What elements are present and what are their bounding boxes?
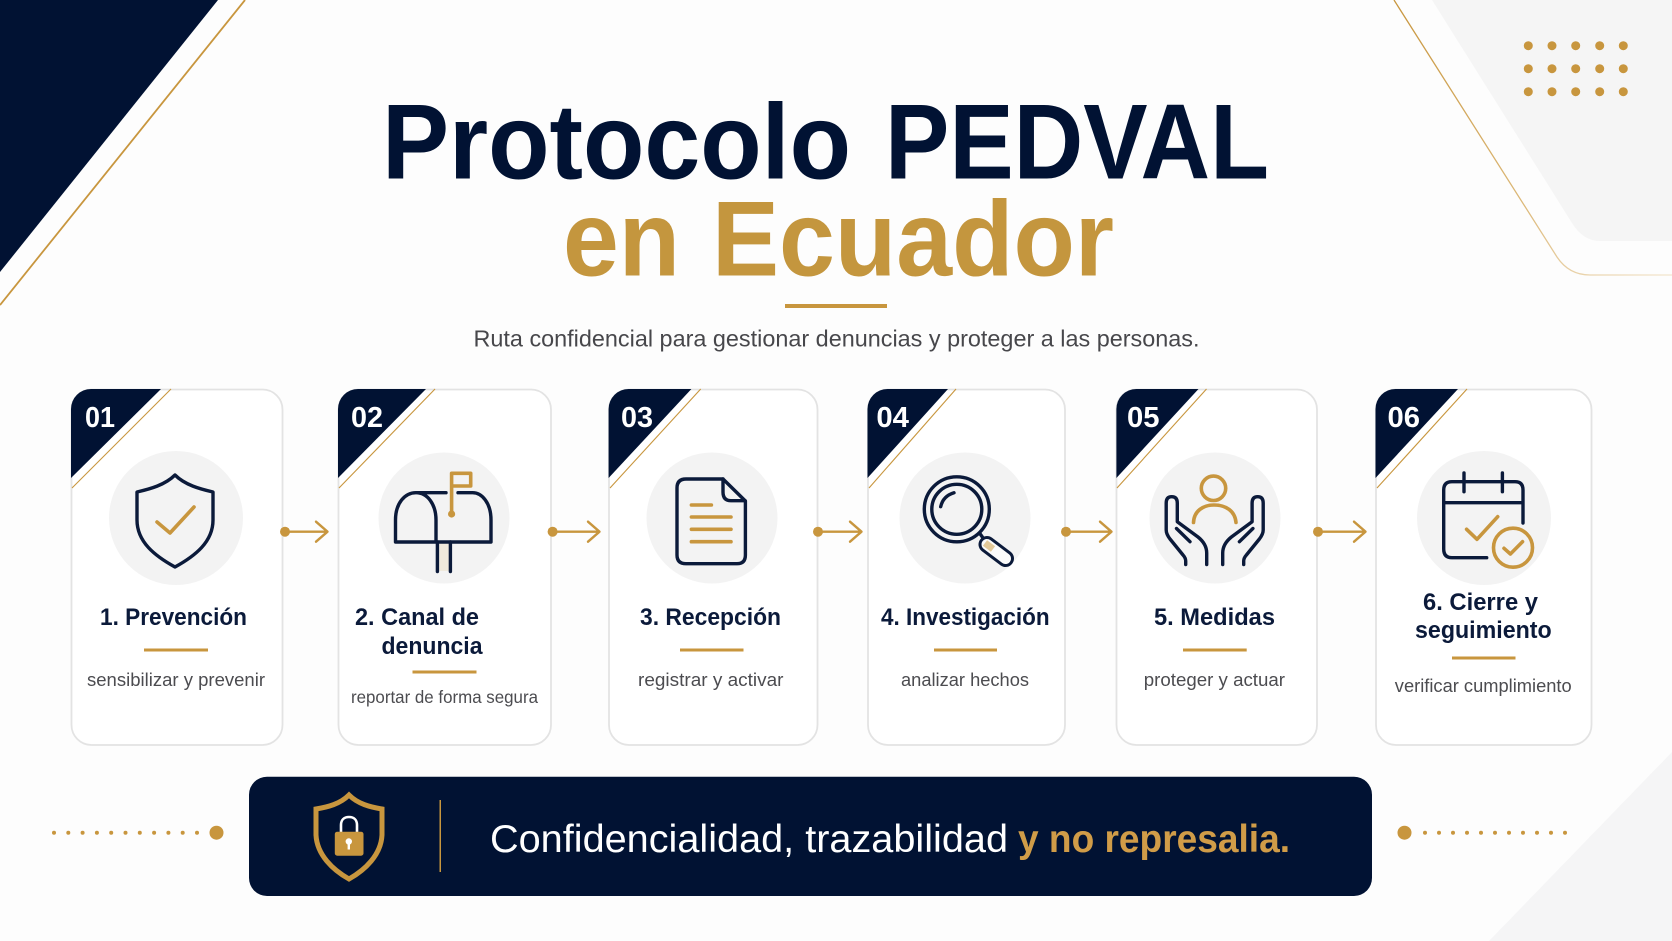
step description: verificar cumplimiento [1395, 675, 1572, 696]
decoration: bottom-right grey triangle [1489, 752, 1672, 941]
decoration: top-left navy corner [0, 0, 245, 305]
panel: step 4 Investigación [868, 389, 1065, 745]
step description: reportar de forma segura [351, 687, 538, 707]
step description: analizar hechos [901, 669, 1029, 690]
step description: proteger y actuar [1144, 669, 1285, 690]
step rule [934, 648, 997, 652]
corner badge 02: 02 [351, 402, 383, 434]
corner badge 03 [609, 389, 701, 488]
decoration: gold dot grid [1524, 41, 1628, 96]
title: Protocolo [382, 82, 851, 201]
corner badge 05: 05 [1127, 402, 1160, 434]
corner badge 01 [71, 389, 171, 488]
icon: shield with padlock [316, 795, 382, 879]
title [382, 82, 1269, 298]
corner badge 06 [1376, 389, 1467, 488]
arrow 3 to 4 [813, 522, 862, 542]
corner badge 01: 01 [85, 402, 115, 434]
banner divider [440, 800, 441, 872]
corner badge 03: 03 [621, 402, 653, 434]
banner: key message [249, 777, 1372, 896]
icon: mailbox with flag [378, 452, 510, 584]
banner message [490, 818, 1290, 861]
arrow 2 to 3 [548, 522, 600, 542]
subtitle: Ruta confidencial para gestionar denuncias y proteger a las personas. [474, 326, 1200, 352]
panel: step 2 Canal de denuncia [338, 389, 551, 745]
step rule [412, 670, 476, 674]
icon: shield with check [109, 451, 243, 585]
step title: denuncia [382, 633, 483, 660]
step description: registrar y activar [638, 669, 784, 690]
corner badge 04 [868, 389, 956, 488]
panel: step 3 Recepción [609, 389, 818, 745]
step rule [1452, 656, 1516, 660]
step title [1415, 589, 1552, 644]
step title: seguimiento [1415, 617, 1552, 644]
title: PEDVAL [885, 82, 1269, 201]
step title: 4. Investigación [881, 604, 1050, 631]
icon: hands protecting person [1150, 452, 1280, 584]
step title: 6. Cierre y [1423, 589, 1538, 616]
step title: 2. Canal de [355, 604, 479, 631]
step title: 5. Medidas [1154, 604, 1275, 631]
banner message: Confidencialidad, trazabilidad [490, 818, 1008, 861]
title: Ecuador [712, 180, 1114, 298]
arrow 1 to 2 [280, 522, 328, 542]
dotted connector left [52, 826, 224, 840]
step rule [1183, 648, 1247, 652]
decoration: top-right grey panel with gold line [1394, 0, 1672, 275]
title divider [785, 304, 887, 308]
panel: step 5 Medidas [1116, 389, 1317, 745]
arrow 5 to 6 [1313, 522, 1366, 542]
title: en [563, 180, 680, 298]
step title: 1. Prevención [100, 604, 247, 631]
corner badge 05 [1116, 389, 1206, 488]
step title [355, 604, 483, 660]
banner message: y no represalia. [1018, 818, 1290, 861]
arrow 4 to 5 [1061, 522, 1112, 542]
corner badge 06: 06 [1388, 402, 1420, 434]
step title: 3. Recepción [640, 604, 781, 631]
corner badge 02 [338, 389, 435, 488]
step rule [144, 648, 208, 652]
icon: document [646, 452, 778, 584]
corner badge 04: 04 [876, 402, 909, 434]
step description: sensibilizar y prevenir [87, 669, 265, 690]
step rule [680, 648, 744, 652]
panel: step 6 Cierre y seguimiento [1376, 389, 1592, 745]
icon: calendar with check [1417, 451, 1551, 585]
panel: step 1 Prevención [71, 389, 282, 745]
icon: magnifying glass [900, 452, 1030, 584]
dotted connector right [1398, 826, 1567, 840]
